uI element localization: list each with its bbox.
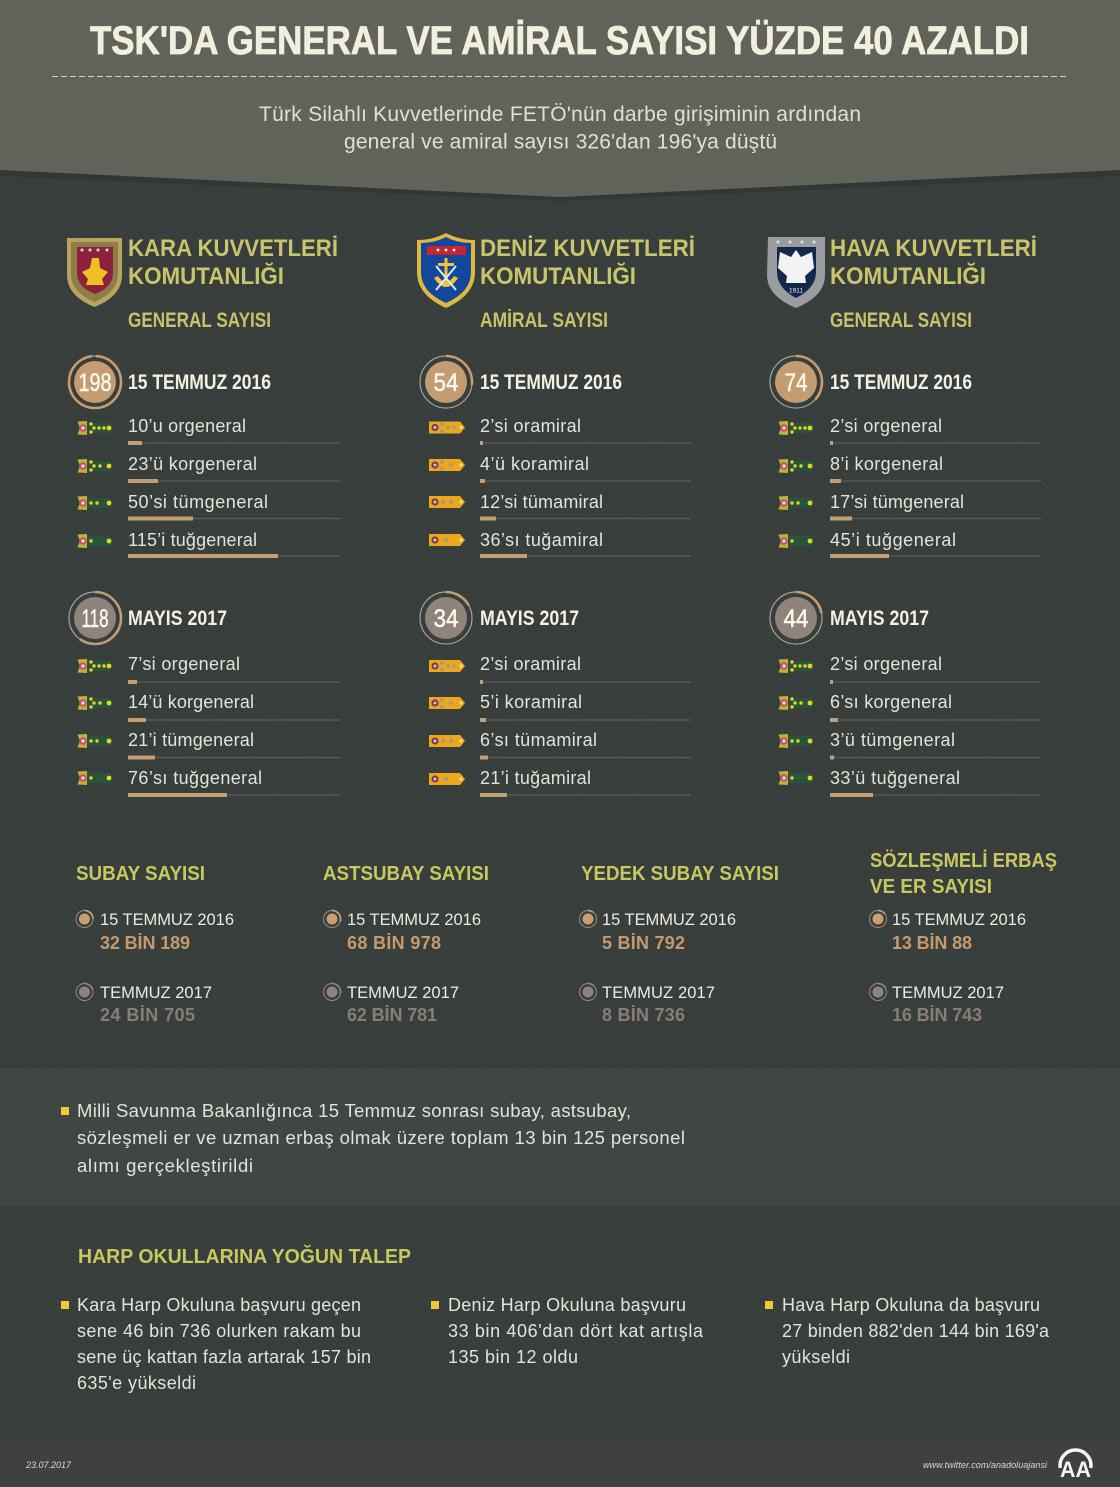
text block: deniz harp okulu <box>431 1295 704 1367</box>
rank rows 2016: 8’i korgeneral <box>830 454 943 474</box>
panel: hava kuvvetleri <box>767 235 1041 797</box>
rank rows 2016: 2’si orgeneral <box>830 416 942 436</box>
heading: VE ER SAYISI <box>870 876 992 898</box>
heading: KOMUTANLIĞI <box>480 262 636 290</box>
date: MAYIS 2017 <box>830 607 929 630</box>
rank rows 2017: 33’ü tuğgeneral <box>830 768 960 788</box>
2016 count badge <box>420 356 472 408</box>
rank rows 2016: 2’si oramiral <box>480 416 581 436</box>
footer url: www.twitter.com/anadoluajansi <box>923 1460 1048 1470</box>
value 2017: 8 BİN 736 <box>602 1005 685 1025</box>
rank rows 2017: 7’si orgeneral <box>128 654 240 674</box>
2016 count badge <box>770 356 822 408</box>
marker 2017 <box>76 984 93 1000</box>
panel: yedek subay sayısı <box>580 863 779 1025</box>
heading: ASTSUBAY SAYISI <box>323 863 489 885</box>
heading: SÖZLEŞMELİ ERBAŞ <box>870 849 1057 872</box>
callout: recruitment note <box>61 1100 685 1176</box>
value 2017: 62 BİN 781 <box>347 1005 437 1025</box>
value 2017: TEMMUZ 2017 <box>347 984 459 1002</box>
value 2016: 68 BİN 978 <box>347 933 441 953</box>
rank rows 2016: 23’ü korgeneral <box>128 454 257 474</box>
2016 count badge: 54 <box>434 369 459 397</box>
2017 count badge: 44 <box>784 605 809 633</box>
heading: KARA KUVVETLERİ <box>128 235 338 262</box>
2017 count badge <box>69 592 121 644</box>
callout: recruitment note: Milli Savunma Bakanlığınca 15 Temmuz sonrası subay, astsubay, <box>77 1100 631 1121</box>
heading: SUBAY SAYISI <box>76 863 205 885</box>
subtitle: general ve amiral sayısı 326'dan 196'ya düştü <box>344 130 777 154</box>
2016 count badge <box>68 355 122 409</box>
text block: deniz harp okulu: 135 bin 12 oldu <box>448 1347 578 1367</box>
rank rows 2016: 36’sı tuğamiral <box>480 530 603 550</box>
text block: kara harp okulu: 635'e yükseldi <box>77 1373 196 1393</box>
rank rows 2017: 3’ü tümgeneral <box>830 730 955 750</box>
marker 2017 <box>324 984 340 1000</box>
text block: kara harp okulu: Kara Harp Okuluna başvuru geçen <box>77 1295 361 1315</box>
heading: harp okulları: HARP OKULLARINA YOĞUN TALEP <box>78 1244 411 1268</box>
value 2016 <box>347 911 481 953</box>
rank rows 2017: 6’sı tümamiral <box>480 730 597 750</box>
heading: KOMUTANLIĞI <box>128 262 284 290</box>
rank rows 2016 <box>429 416 691 558</box>
2016 count badge: 74 <box>784 369 808 397</box>
rank rows 2017: 2’si orgeneral <box>830 654 942 674</box>
icon: kara emblem <box>67 238 122 307</box>
heading: KOMUTANLIĞI <box>830 262 986 290</box>
rank rows 2016: 45’i tuğgeneral <box>830 530 956 550</box>
panel: sözleşmeli erbaş ve er sayısı <box>870 849 1057 1025</box>
marker 2016 <box>324 910 340 928</box>
panel: deniz kuvvetleri <box>417 233 695 797</box>
rank rows 2016: 50’si tümgeneral <box>128 492 268 512</box>
rank rows 2017 <box>778 654 1041 797</box>
2017 count badge <box>420 592 472 644</box>
date: 15 TEMMUZ 2016 <box>480 371 622 394</box>
value 2017: 16 BİN 743 <box>892 1005 982 1025</box>
marker 2016 <box>870 910 886 928</box>
text block: deniz harp okulu: Deniz Harp Okuluna başvuru <box>448 1295 686 1315</box>
value 2017 <box>602 984 715 1025</box>
subtitle <box>259 103 861 154</box>
footer date: 23.07.2017 <box>25 1460 72 1470</box>
value 2016: 15 TEMMUZ 2016 <box>602 911 736 929</box>
2017 count badge: 34 <box>434 605 459 633</box>
2017 count badge: 118 <box>82 605 108 633</box>
rank rows 2016: 10’u orgeneral <box>128 416 246 436</box>
value 2016 <box>602 911 736 953</box>
marker 2017 <box>870 984 886 1000</box>
icon: hava emblem <box>767 237 825 308</box>
rank rows 2017: 21’i tuğamiral <box>480 768 591 788</box>
heading: YEDEK SUBAY SAYISI <box>581 863 779 885</box>
band: personnel recruitment <box>0 1068 1120 1206</box>
value 2016: 5 BİN 792 <box>602 933 685 953</box>
rank rows 2017: 76’sı tuğgeneral <box>128 768 262 788</box>
rank rows 2017: 14’ü korgeneral <box>128 692 254 712</box>
icon: AA logo: AA <box>1060 1457 1091 1482</box>
text block: kara harp okulu <box>61 1295 371 1393</box>
header panel <box>0 0 1120 201</box>
date: 15 TEMMUZ 2016 <box>830 371 972 394</box>
value 2017 <box>347 984 459 1025</box>
marker 2016 <box>580 910 596 928</box>
value 2016: 13 BİN 88 <box>892 933 972 953</box>
icon: deniz emblem <box>417 233 475 308</box>
panel: astsubay sayısı <box>323 863 489 1025</box>
rank rows 2017: 5’i koramiral <box>480 692 582 712</box>
value 2016 <box>100 911 234 953</box>
subheading: GENERAL SAYISI <box>830 309 972 332</box>
text block: hava harp okulu: Hava Harp Okuluna da başvuru <box>782 1295 1040 1315</box>
subheading: GENERAL SAYISI <box>128 309 271 332</box>
value 2017: TEMMUZ 2017 <box>602 984 715 1002</box>
2017 count badge <box>770 592 822 644</box>
text block: deniz harp okulu: 33 bin 406'dan dört kat artışla <box>448 1321 704 1341</box>
subtitle: Türk Silahlı Kuvvetlerinde FETÖ'nün darbe girişiminin ardından <box>259 103 861 126</box>
heading <box>480 235 695 290</box>
callout: recruitment note: alımı gerçekleştirildi <box>77 1155 253 1176</box>
value 2017 <box>100 984 212 1025</box>
date: 15 TEMMUZ 2016 <box>128 371 271 394</box>
rank rows 2017 <box>429 654 691 797</box>
rank rows 2016: 4’ü koramiral <box>480 454 589 474</box>
value 2016: 15 TEMMUZ 2016 <box>100 911 234 929</box>
value 2016: 15 TEMMUZ 2016 <box>892 911 1026 929</box>
rank rows 2017: 21’i tümgeneral <box>128 730 254 750</box>
rank rows 2016: 17’si tümgeneral <box>830 492 964 512</box>
heading <box>830 235 1037 290</box>
rank rows 2017: 6’sı korgeneral <box>830 692 952 712</box>
date: MAYIS 2017 <box>480 607 579 630</box>
value 2017: 24 BİN 705 <box>100 1005 195 1025</box>
heading <box>870 849 1057 898</box>
rank rows 2016: 115’i tuğgeneral <box>128 530 257 550</box>
rank rows 2016: 12’si tümamiral <box>480 492 603 512</box>
date: MAYIS 2017 <box>128 607 227 630</box>
heading <box>128 235 338 290</box>
marker 2017 <box>580 984 596 1000</box>
2016 count badge: 198 <box>78 369 112 397</box>
text block: hava harp okulu <box>765 1295 1050 1367</box>
value 2017: TEMMUZ 2017 <box>100 984 212 1002</box>
rank rows 2017: 2’si oramiral <box>480 654 581 674</box>
text block: hava harp okulu: 27 binden 882'den 144 bin 169'a <box>782 1321 1050 1341</box>
rank rows 2017 <box>77 654 340 797</box>
footer band <box>0 1440 1120 1487</box>
heading: HAVA KUVVETLERİ <box>830 235 1037 262</box>
rank rows 2016 <box>778 416 1041 558</box>
panel: subay sayısı <box>76 863 234 1025</box>
value 2017: TEMMUZ 2017 <box>892 984 1004 1002</box>
panel: kara kuvvetleri <box>67 235 340 797</box>
value 2016 <box>892 911 1026 953</box>
text block: kara harp okulu: sene üç kattan fazla artarak 157 bin <box>77 1347 371 1367</box>
subheading: AMİRAL SAYISI <box>480 309 608 332</box>
text block: hava harp okulu: yükseldi <box>782 1347 850 1367</box>
callout: recruitment note: sözleşmeli er ve uzman erbaş olmak üzere toplam 13 bin 125 personel <box>77 1127 685 1148</box>
marker 2016 <box>76 910 93 928</box>
rank rows 2016 <box>77 416 340 558</box>
value 2017 <box>892 984 1004 1025</box>
icon: hava emblem: 1911 <box>789 288 803 294</box>
value 2016: 32 BİN 189 <box>100 933 190 953</box>
text block: kara harp okulu: sene 46 bin 736 olurken rakam bu <box>77 1321 361 1341</box>
heading: DENİZ KUVVETLERİ <box>480 235 695 262</box>
value 2016: 15 TEMMUZ 2016 <box>347 911 481 929</box>
